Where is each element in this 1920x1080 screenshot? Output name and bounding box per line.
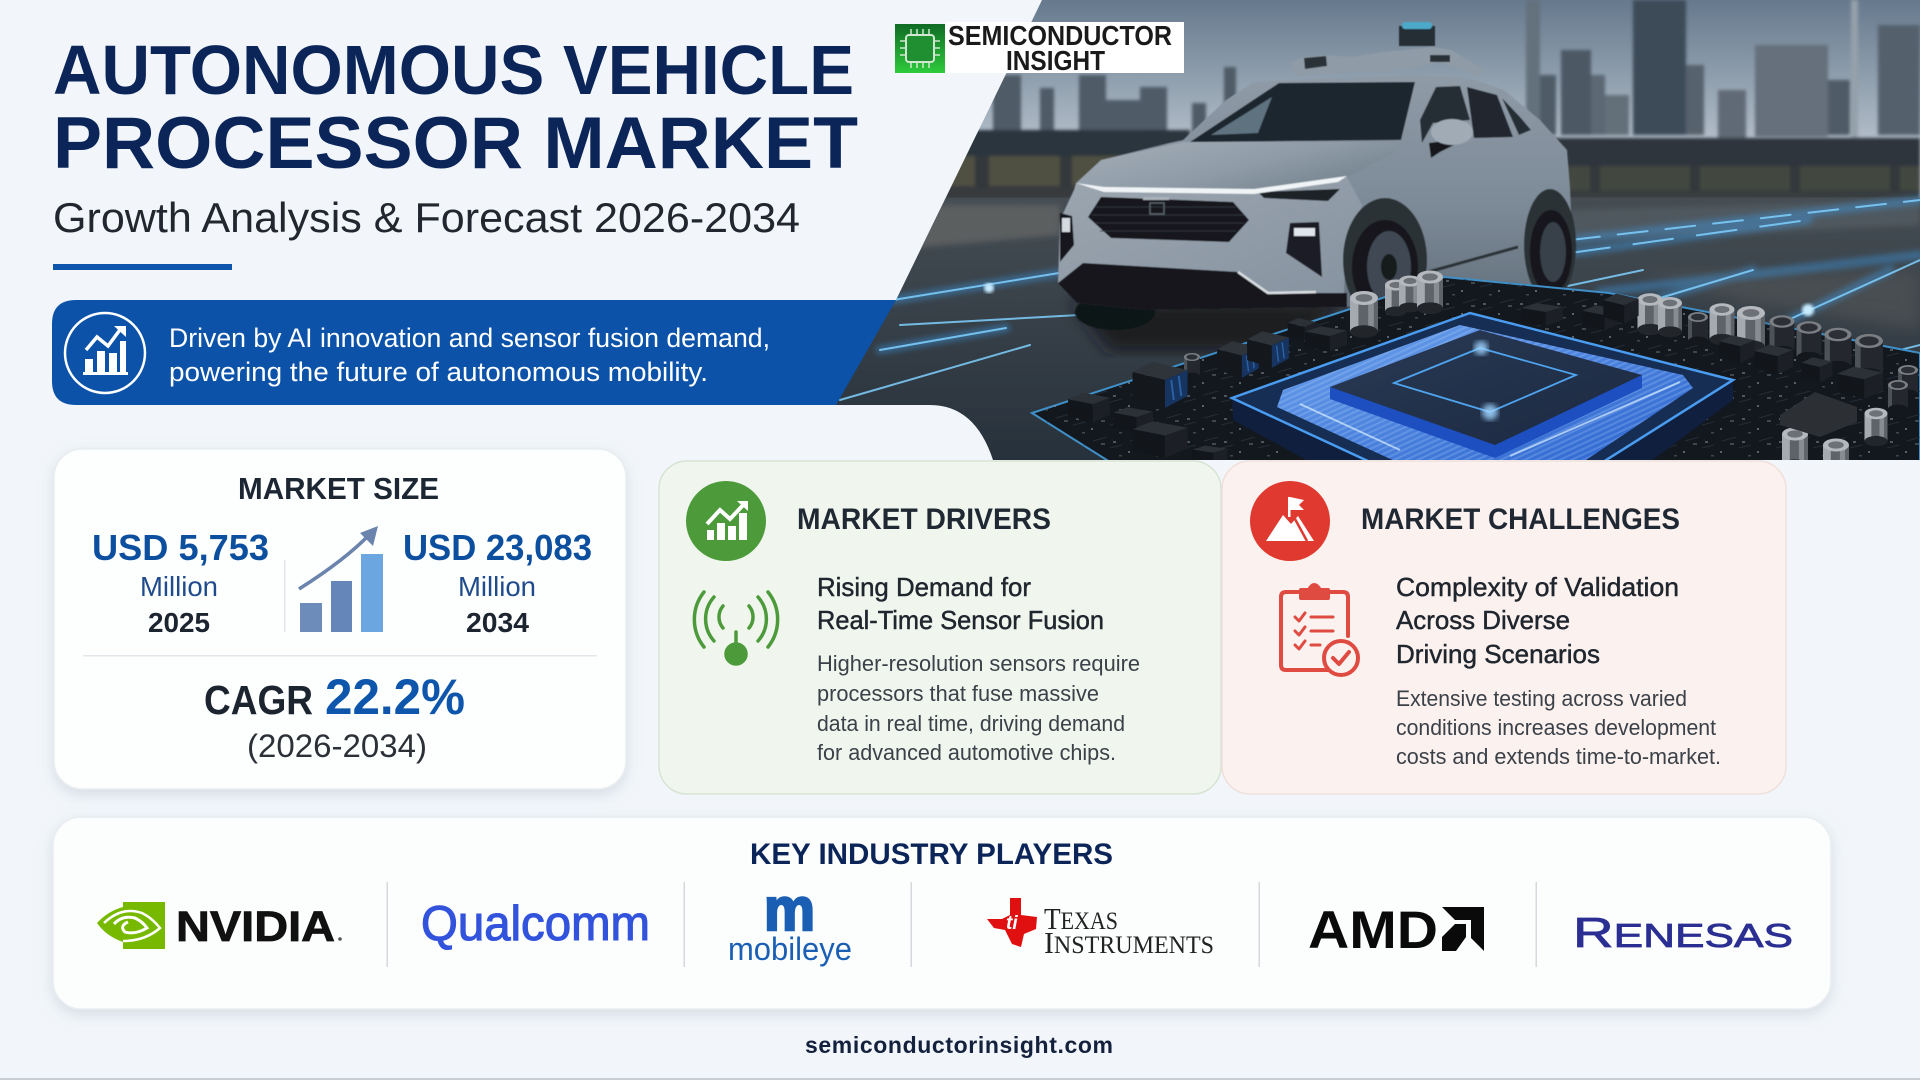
logo: NVIDIA bbox=[97, 902, 342, 951]
headlight strip bbox=[1076, 176, 1347, 201]
logo: Renesas: R ENESAS bbox=[1573, 909, 1793, 956]
driver description: for advanced automotive chips. bbox=[817, 740, 1116, 765]
logo: Texas Instruments: ti bbox=[1006, 913, 1018, 934]
icon: green chip bbox=[895, 24, 945, 73]
windshield bbox=[1190, 82, 1415, 142]
glowing substrate bbox=[1277, 325, 1693, 462]
processor die bbox=[1330, 330, 1642, 445]
challenge description bbox=[1396, 686, 1721, 769]
challenge heading bbox=[1396, 572, 1679, 669]
rear wheel bbox=[1530, 210, 1572, 294]
heading: market drivers: MARKET DRIVERS bbox=[797, 503, 1051, 536]
wheel arch bbox=[1342, 198, 1428, 296]
value 2034 bbox=[403, 527, 592, 638]
challenge description: Extensive testing across varied bbox=[1396, 686, 1687, 711]
corner marker lamp bbox=[1060, 213, 1074, 262]
heading: market challenges: MARKET CHALLENGES bbox=[1361, 503, 1680, 536]
challenge description: conditions increases development bbox=[1396, 715, 1716, 740]
processor package bbox=[1232, 313, 1733, 462]
logo: Mobileye: m bbox=[764, 876, 815, 943]
logo: Qualcomm: Qualcomm bbox=[421, 897, 650, 951]
logo: Texas Instruments: INSTRUMENTS bbox=[1044, 925, 1214, 960]
sky bbox=[944, 0, 1920, 200]
capacitors bbox=[1184, 270, 1918, 460]
driver description: processors that fuse massive bbox=[817, 681, 1099, 706]
challenge heading: Across Diverse bbox=[1396, 605, 1570, 635]
circuit board bbox=[1030, 270, 1920, 460]
icon: green growth chart bbox=[686, 481, 766, 561]
lower bumper intake bbox=[1058, 263, 1347, 310]
body bbox=[1058, 75, 1572, 310]
panel: market drivers bbox=[659, 461, 1221, 794]
value 2025: 2025 bbox=[148, 607, 210, 638]
logo: Mobileye bbox=[728, 876, 852, 967]
CAGR: (2026-2034) bbox=[247, 728, 427, 764]
elevated highway bbox=[830, 130, 1920, 200]
logo: AMD: AMD bbox=[1308, 901, 1438, 960]
logo wordmark: INSIGHT bbox=[1006, 45, 1105, 76]
challenge heading: Complexity of Validation bbox=[1396, 572, 1679, 602]
rear wheel arch bbox=[1524, 189, 1576, 301]
footer website: semiconductorinsight.com bbox=[805, 1032, 1113, 1058]
CAGR: CAGR bbox=[204, 677, 313, 723]
logo: AMD bbox=[1308, 901, 1484, 960]
driver heading: Real-Time Sensor Fusion bbox=[817, 605, 1104, 635]
icon: sensor signal bbox=[694, 592, 778, 664]
driver heading bbox=[817, 572, 1104, 635]
value 2025 bbox=[92, 527, 269, 638]
CAGR: 22.2% bbox=[325, 669, 465, 725]
car bbox=[1058, 22, 1576, 352]
heading: market size: MARKET SIZE bbox=[238, 471, 439, 506]
hero image: car on road with processor board bbox=[830, 0, 1920, 482]
driver description bbox=[817, 651, 1140, 765]
tagline text bbox=[169, 323, 770, 387]
driver heading: Rising Demand for bbox=[817, 572, 1031, 602]
value 2025: USD 5,753 bbox=[92, 527, 269, 568]
roof sensor rack bbox=[1290, 22, 1485, 77]
front fascia bbox=[1058, 177, 1362, 297]
heading: key industry players: KEY INDUSTRY PLAYERS bbox=[750, 838, 1113, 871]
value 2034: USD 23,083 bbox=[403, 527, 592, 568]
challenge description: costs and extends time-to-market. bbox=[1396, 744, 1721, 769]
door mirror bbox=[1429, 119, 1473, 158]
road surface bbox=[830, 198, 1920, 462]
driver description: data in real time, driving demand bbox=[817, 711, 1125, 736]
front wheel bbox=[1352, 220, 1418, 298]
near front tyre bbox=[1075, 294, 1155, 330]
logo: Mobileye: mobileye bbox=[728, 931, 852, 967]
panel: key industry players bbox=[53, 817, 1831, 1009]
value 2034: Million bbox=[458, 571, 536, 602]
title bbox=[53, 31, 858, 184]
logo: Texas Instruments bbox=[987, 898, 1214, 960]
chip components bbox=[1068, 294, 1883, 464]
value 2034: 2034 bbox=[466, 607, 529, 638]
logo: Texas Instruments: TEXAS bbox=[1044, 901, 1118, 936]
title: AUTONOMOUS VEHICLE bbox=[53, 31, 854, 109]
challenge heading: Driving Scenarios bbox=[1396, 639, 1600, 669]
city skyline bbox=[993, 0, 1920, 140]
logo: NVIDIA: NVIDIA bbox=[176, 903, 335, 951]
hood bbox=[1076, 142, 1350, 188]
growth bar chart bbox=[284, 526, 383, 632]
panel: market challenges bbox=[1222, 461, 1786, 794]
brand logo bbox=[895, 20, 1184, 76]
value 2025: Million bbox=[140, 571, 218, 602]
logo wordmark bbox=[948, 20, 1172, 76]
tagline banner bbox=[52, 300, 900, 405]
fog lamp housing bbox=[1286, 222, 1322, 277]
die side bbox=[1330, 375, 1642, 458]
car shadow bbox=[1070, 300, 1350, 352]
tagline text: powering the future of autonomous mobility. bbox=[169, 357, 708, 387]
tagline text: Driven by AI innovation and sensor fusion demand, bbox=[169, 323, 770, 353]
grille bbox=[1088, 197, 1249, 242]
road light trails bbox=[840, 200, 1920, 400]
icon: checklist clipboard bbox=[1281, 585, 1358, 675]
subtitle: Growth Analysis & Forecast 2026-2034 bbox=[53, 194, 800, 241]
driver description: Higher-resolution sensors require bbox=[817, 651, 1140, 676]
icon: growth chart in circle bbox=[65, 313, 145, 393]
icon: mountain flag bbox=[1250, 481, 1330, 561]
panel: market size bbox=[54, 449, 626, 789]
title underline accent bbox=[53, 264, 232, 270]
logo wordmark: SEMICONDUCTOR bbox=[948, 20, 1172, 51]
title: PROCESSOR MARKET bbox=[53, 103, 858, 184]
CAGR bbox=[204, 669, 465, 764]
side windows bbox=[1420, 86, 1470, 143]
